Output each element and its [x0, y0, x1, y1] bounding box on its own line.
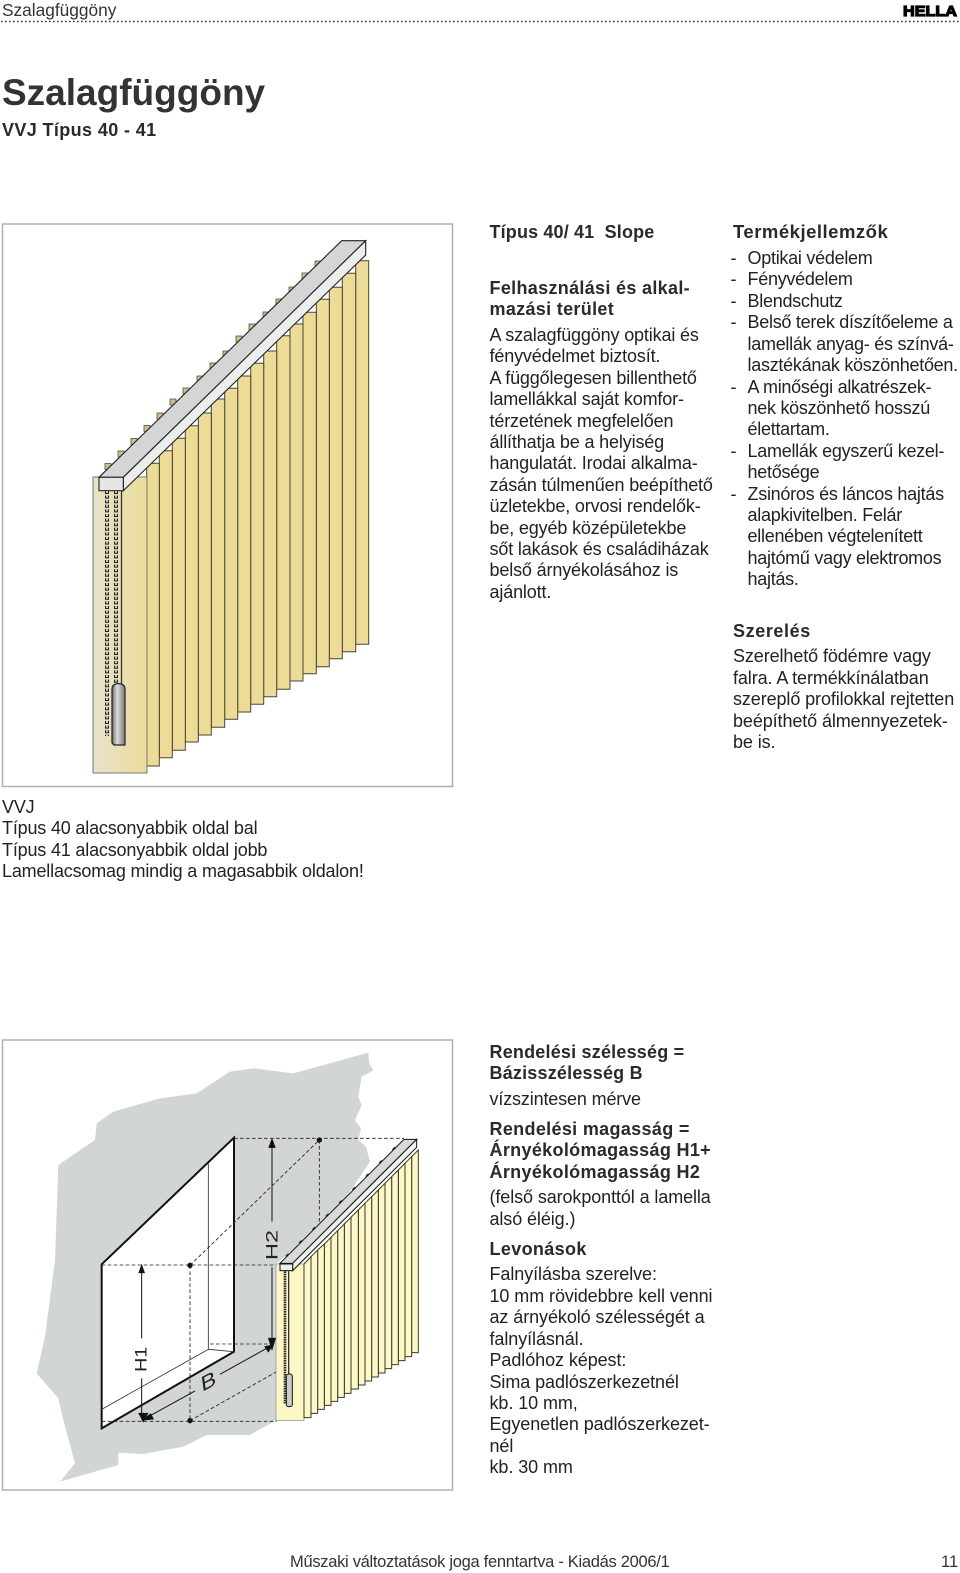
text: deductions: kb. 30 mm: [490, 1457, 573, 1477]
text: usage: sőt lakások és családiházak: [490, 539, 709, 559]
text: usage: üzletekbe, orvosi rendelők-: [490, 496, 701, 516]
text: features list: élettartam.: [748, 419, 830, 439]
text: type heading: Típus 40/ 41 Slope: [490, 222, 654, 242]
text: order width: Rendelési szélesség =: [490, 1042, 684, 1062]
text: usage: mazási terület: [490, 299, 614, 319]
window opening: [102, 1138, 234, 1428]
text: features heading: Termékjellemzők: [733, 221, 888, 242]
text: usage: térzetének megfelelően: [490, 411, 673, 431]
text: usage: lamellákkal saját komfor-: [490, 389, 684, 409]
text: features list: Optikai védelem: [748, 248, 873, 268]
text: usage: A szalagfüggöny optikai és: [490, 325, 699, 345]
text: deductions: Levonások: [490, 1239, 587, 1259]
text: deductions: Egyenetlen padlószerkezet-: [490, 1414, 710, 1434]
dimension labels: H1: [132, 1347, 151, 1372]
header dotted rule: [1, 20, 959, 22]
text: features list: -: [730, 377, 736, 397]
text: usage: [490, 278, 713, 602]
text: order height: [490, 1119, 711, 1229]
text: features list: -: [730, 248, 736, 268]
text: deductions: Padlóhoz képest:: [490, 1350, 626, 1370]
figure: measurement diagram: [2, 1039, 454, 1491]
dashed guides: [102, 1138, 404, 1421]
dimension arrows: [139, 1139, 275, 1422]
text: deductions: falnyílásnál.: [490, 1329, 584, 1349]
text: features list: -: [730, 291, 736, 311]
subtitle: VVJ Típus 40 - 41: [2, 120, 157, 140]
text: usage: fényvédelmet biztosít.: [490, 346, 660, 366]
text: order width: vízszintesen mérve: [490, 1089, 641, 1109]
text: features list: hetősége: [748, 462, 819, 482]
text: deductions: az árnyékoló szélességét a: [490, 1307, 705, 1327]
text: order height: Rendelési magasság =: [490, 1119, 690, 1139]
logo: HELLA: [903, 3, 957, 20]
text: features list: lamellák anyag- és színvá-: [748, 334, 954, 354]
text: deductions: [490, 1239, 712, 1477]
headrail: [99, 241, 366, 477]
dimension labels: B: [200, 1367, 217, 1397]
text: features list: -: [730, 269, 736, 289]
text: usage: zásán túlmenűen beépíthető: [490, 475, 713, 495]
text: deductions: nél: [490, 1436, 513, 1456]
text: features list: -: [730, 484, 736, 504]
text: features list: hajtás.: [748, 569, 799, 589]
text: order height: (felső sarokponttól a lamella: [490, 1187, 711, 1207]
text: mounting: Szerelhető födémre vagy: [733, 646, 931, 666]
blind slats: [304, 1150, 418, 1418]
text: usage: ajánlott.: [490, 582, 551, 602]
wall: [37, 1053, 373, 1482]
dimension labels: [132, 1230, 281, 1397]
slats: [147, 261, 369, 766]
blind hooks: [286, 1147, 395, 1257]
text: deductions: Falnyílásba szerelve:: [490, 1264, 657, 1284]
blind panel: [276, 1264, 304, 1421]
text: figure caption: Típus 40 alacsonyabbik oldal bal: [2, 818, 257, 838]
text: features list: A minőségi alkatrészek-: [748, 377, 931, 397]
figure: slope vertical blind: [2, 223, 454, 788]
text: figure caption: Típus 41 alacsonyabbik oldal jobb: [2, 840, 267, 860]
text: mounting: [733, 621, 954, 752]
text: usage: be, egyéb középületekbe: [490, 518, 686, 538]
text: usage: hangulatát. Irodai alkalma-: [490, 453, 698, 473]
text: features list: Fényvédelem: [748, 269, 853, 289]
text: order height: alsó éléig.): [490, 1209, 575, 1229]
text: usage: Felhasználási és alkal-: [490, 278, 690, 298]
text: mounting: szereplő profilokkal rejtetten: [733, 689, 954, 709]
first panel: [93, 477, 147, 773]
chain: [107, 491, 122, 736]
text: mounting: falra. A termékkínálatban: [733, 668, 929, 688]
text: deductions: Sima padlószerkezetnél: [490, 1372, 679, 1392]
text: figure caption: Lamellacsomag mindig a magasabbik oldalon!: [2, 861, 364, 881]
slat hooks: [105, 261, 321, 470]
text: mounting: Szerelés: [733, 621, 811, 641]
text: features list: Lamellák egyszerű kezel-: [748, 441, 944, 461]
text: order width: Bázisszélesség B: [490, 1063, 643, 1083]
text: features list: hajtómű vagy elektromos: [748, 548, 941, 568]
text: mounting: beépíthető álmennyezetek-: [733, 711, 948, 731]
blind headrail: [280, 1139, 417, 1263]
text: figure caption: VVJ: [2, 797, 34, 817]
text: usage: állíthatja be a helyiség: [490, 432, 664, 452]
text: features list: Zsinóros és láncos hajtás: [748, 484, 944, 504]
text: features list: ellenében végtelenített: [748, 526, 922, 546]
weight: [112, 684, 125, 745]
text: features list: -: [730, 441, 736, 461]
footer note: Műszaki változtatások joga fenntartva - Kiadás 2006/1: [290, 1553, 669, 1571]
text: usage: belső árnyékolásához is: [490, 560, 678, 580]
text: features list: lasztékának köszönhetően.: [748, 355, 958, 375]
text: features list: Belső terek díszítőeleme a: [748, 312, 953, 332]
text: mounting: be is.: [733, 732, 775, 752]
text: order height: Árnyékolómagasság H2: [490, 1162, 700, 1182]
title: Szalagfüggöny: [2, 72, 265, 113]
blind weight: [286, 1374, 292, 1407]
running header: Szalagfüggöny: [2, 0, 116, 20]
text: features list: alapkivitelben. Felár: [748, 505, 902, 525]
text: features list: nek köszönhető hosszú: [748, 398, 930, 418]
text: figure caption: [2, 797, 364, 881]
text: usage: A függőlegesen billenthető: [490, 368, 697, 388]
text: features list: -: [730, 312, 736, 332]
text: features list: [730, 248, 958, 589]
text: deductions: kb. 10 mm,: [490, 1393, 578, 1413]
text: order width: [490, 1042, 684, 1109]
blind chain: [281, 1271, 289, 1403]
guide dots: [187, 1137, 322, 1423]
dimension labels: H2: [262, 1230, 281, 1260]
text: features list: Blendschutz: [748, 291, 843, 311]
page number: 11: [941, 1553, 958, 1571]
text: deductions: 10 mm rövidebbre kell venni: [490, 1286, 712, 1306]
text: order height: Árnyékolómagasság H1+: [490, 1140, 711, 1160]
